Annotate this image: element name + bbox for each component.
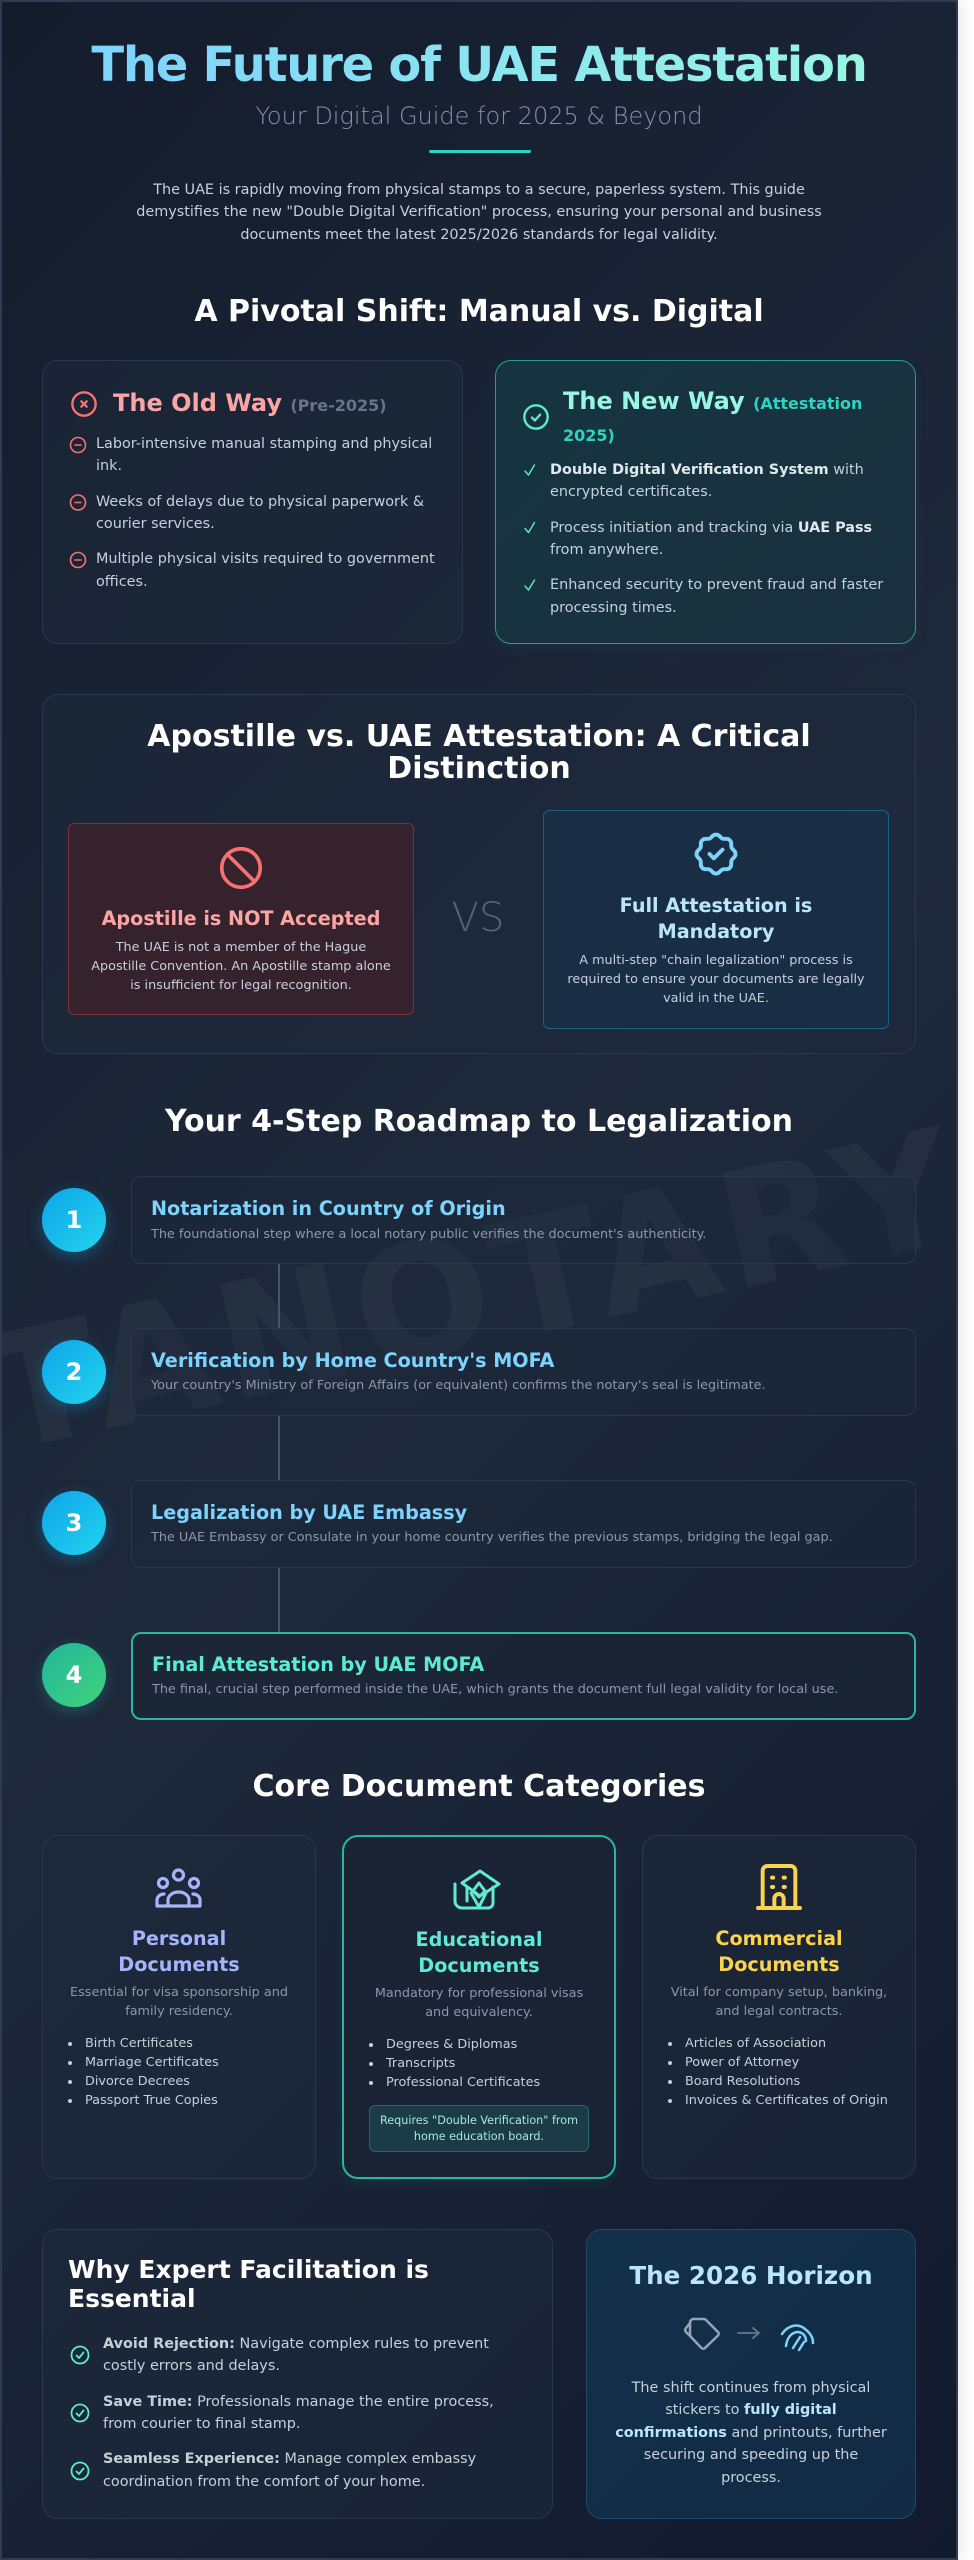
panel: personal documents (42, 1835, 316, 2179)
new way heading: The New Way (Attestation (563, 387, 862, 415)
panel: apostille not accepted (68, 823, 414, 1015)
attestation heading: Mandatory (658, 920, 774, 943)
step 4 card (131, 1632, 916, 1720)
step 1 card (131, 1176, 916, 1264)
panel: full attestation (543, 810, 889, 1029)
apostille text: The UAE is not a member of the Hague (116, 940, 366, 955)
step 4 badge: 4 (66, 1661, 82, 1689)
personal text: Essential for visa sponsorship and (70, 1985, 288, 2000)
old way list (96, 436, 435, 590)
panel: apostille vs attestation (42, 694, 916, 1054)
commercial list: Board Resolutions (685, 2074, 800, 2089)
callout: double verification: home education board. (414, 2130, 544, 2143)
icon: rosette check (694, 832, 738, 876)
old way heading: The Old Way (Pre-2025) (113, 389, 387, 417)
expert list: from courier to final stamp. Seamless Experience: Manage complex embassy (103, 2416, 476, 2467)
step 2 title: Verification by Home Country's MOFA (151, 1349, 554, 1372)
step 3 badge: 3 (66, 1509, 82, 1537)
educational text: and equivalency. (425, 2005, 533, 2020)
heading: apostille (147, 719, 811, 786)
intro text: demystifies the new "Double Digital Verification" process, ensuring your personal and business (136, 204, 822, 220)
icons: minus circles (70, 436, 86, 568)
commercial heading: Documents (718, 1953, 840, 1976)
old way list: ink. Weeks of delays due to physical paperwork & (96, 458, 424, 510)
educational list: Degrees & Diplomas (386, 2037, 517, 2052)
panel: commercial documents (642, 1835, 916, 2179)
personal heading: Personal (132, 1927, 226, 1950)
expert heading (68, 2255, 429, 2313)
expert list: coordination from the comfort of your home. (103, 2474, 425, 2490)
heading: core categories: Core Document Categories (253, 1769, 705, 1804)
commercial list (685, 2036, 888, 2108)
step 1 text: The foundational step where a local notary public verifies the document's authenticity. (151, 1227, 706, 1242)
attestation text: required to ensure your documents are legally (567, 972, 865, 987)
horizon heading: The 2026 Horizon (629, 2261, 873, 2290)
old way list: courier services. Multiple physical visits required to government (96, 516, 435, 567)
personal list (85, 2036, 219, 2108)
apostille text: is insufficient for legal recognition. (130, 978, 352, 993)
step 1 badge: 1 (66, 1206, 82, 1234)
commercial bullets (668, 2042, 672, 2103)
title divider (429, 150, 531, 153)
personal bullets (68, 2042, 72, 2103)
icons: checks (524, 464, 536, 591)
intro text: documents meet the latest 2025/2026 standards for legal validity. (240, 227, 718, 243)
step 1 badge (42, 1188, 106, 1252)
new way list: from anywhere. Enhanced security to prevent fraud and faster (550, 542, 883, 593)
expert heading: Why Expert Facilitation is (68, 2255, 429, 2284)
attestation text: A multi-step "chain legalization" process is (579, 953, 853, 968)
callout: double verification (369, 2105, 589, 2152)
new way list: Double Digital Verification System with (550, 462, 864, 478)
icon: x circle (71, 391, 97, 417)
step 3 text: The UAE Embassy or Consulate in your home country verifies the previous stamps, bridging the legal gap. (151, 1530, 833, 1545)
old way list: Labor-intensive manual stamping and physical (96, 436, 432, 452)
personal text: family residency. (125, 2004, 233, 2019)
step 4 text: The final, crucial step performed inside the UAE, which grants the document full legal validity for local use. (152, 1682, 838, 1697)
educational list (386, 2037, 540, 2090)
commercial text (670, 1985, 887, 2019)
personal list: Birth Certificates (85, 2036, 193, 2051)
connector 1 (278, 1263, 280, 1328)
commercial text: Vital for company setup, banking, (671, 1985, 887, 2000)
educational heading (416, 1928, 542, 1977)
step 3 card (131, 1480, 916, 1568)
expert list: Avoid Rejection: Navigate complex rules to prevent (103, 2336, 489, 2352)
commercial list: Power of Attorney (685, 2055, 799, 2070)
step 2 card (131, 1328, 916, 1416)
attestation text (567, 953, 865, 1006)
icon: education (454, 1870, 501, 1910)
icon: arrow (737, 2327, 760, 2339)
heading: roadmap: Your 4-Step Roadmap to Legalization (165, 1104, 793, 1139)
step 3 title: Legalization by UAE Embassy (151, 1501, 467, 1524)
expert heading: Essential (68, 2284, 196, 2313)
horizon text: stickers to fully digital (665, 2402, 837, 2418)
icon: building (756, 1864, 802, 1910)
connector 2 (278, 1415, 280, 1480)
step 1 title: Notarization in Country of Origin (151, 1197, 506, 1220)
icon: check circle (523, 404, 549, 430)
step 4 badge (42, 1643, 106, 1707)
subtitle: Your Digital Guide for 2025 & Beyond (255, 102, 703, 130)
personal heading (118, 1927, 240, 1976)
personal list: Passport True Copies (85, 2093, 218, 2108)
horizon text (615, 2380, 887, 2486)
educational bullets (369, 2043, 373, 2085)
attestation heading (620, 894, 812, 943)
expert list: costly errors and delays. Save Time: Professionals manage the entire process, (103, 2358, 494, 2410)
icon: ban (220, 846, 262, 890)
horizon text: process. (721, 2470, 781, 2486)
horizon text: confirmations and printouts, further (615, 2425, 887, 2441)
apostille heading: Apostille is NOT Accepted (102, 907, 380, 930)
commercial list: Articles of Association (685, 2036, 826, 2051)
vs label: VS (452, 895, 504, 941)
panel: 2026 horizon (586, 2229, 916, 2519)
personal list: Marriage Certificates (85, 2055, 219, 2070)
panel: new way (495, 360, 916, 644)
heading: apostille: Apostille vs. UAE Attestation: A Critical (147, 719, 811, 754)
step 4 title: Final Attestation by UAE MOFA (152, 1653, 484, 1676)
new way heading (563, 387, 862, 445)
icon: fingerprint (780, 2324, 814, 2352)
apostille text: Apostille Convention. An Apostille stamp alone (91, 959, 391, 974)
step 3 badge (42, 1491, 106, 1555)
new way heading: 2025) (563, 426, 615, 445)
panel: old way (42, 360, 463, 644)
personal heading: Documents (118, 1953, 240, 1976)
panel: educational documents (342, 1835, 616, 2179)
commercial text: and legal contracts. (715, 2004, 843, 2019)
heading: pivotal shift: A Pivotal Shift: Manual vs. Digital (194, 294, 764, 329)
educational list: Transcripts (386, 2056, 455, 2071)
commercial list: Invoices & Certificates of Origin (685, 2093, 888, 2108)
educational text: Mandatory for professional visas (375, 1986, 583, 2001)
apostille text (91, 940, 391, 993)
new way list: processing times. (550, 600, 677, 616)
personal list: Divorce Decrees (85, 2074, 190, 2089)
panel: expert facilitation (42, 2229, 553, 2519)
intro text (136, 182, 822, 243)
icon: tag (684, 2318, 720, 2350)
expert list (103, 2336, 494, 2490)
attestation heading: Full Attestation is (620, 894, 812, 917)
step 2 badge (42, 1340, 106, 1404)
attestation text: valid in the UAE. (663, 991, 769, 1006)
icons: expert checks (70, 2346, 90, 2480)
educational list: Professional Certificates (386, 2075, 540, 2090)
commercial heading: Commercial (715, 1927, 843, 1950)
educational heading: Educational (416, 1928, 542, 1951)
new way list: encrypted certificates. Process initiation and tracking via UAE Pass (550, 484, 872, 536)
title: The Future of UAE Attestation (91, 37, 867, 93)
personal text (70, 1985, 288, 2019)
icon: people (155, 1868, 202, 1908)
commercial heading (715, 1927, 843, 1976)
horizon text: The shift continues from physical (632, 2380, 870, 2396)
heading: apostille: Distinction (387, 751, 571, 786)
old way list: offices. (96, 574, 148, 590)
horizon text: securing and speeding up the (644, 2447, 858, 2463)
new way list (550, 462, 884, 616)
educational heading: Documents (418, 1954, 540, 1977)
step 2 badge: 2 (66, 1358, 82, 1386)
educational text (375, 1986, 583, 2020)
step 2 text: Your country's Ministry of Foreign Affairs (or equivalent) confirms the notary's seal is legitimate. (151, 1378, 766, 1393)
intro text: The UAE is rapidly moving from physical stamps to a secure, paperless system. This guide (153, 182, 805, 198)
connector 3 (278, 1567, 280, 1632)
callout: double verification: Requires "Double Verification" from (380, 2114, 578, 2127)
